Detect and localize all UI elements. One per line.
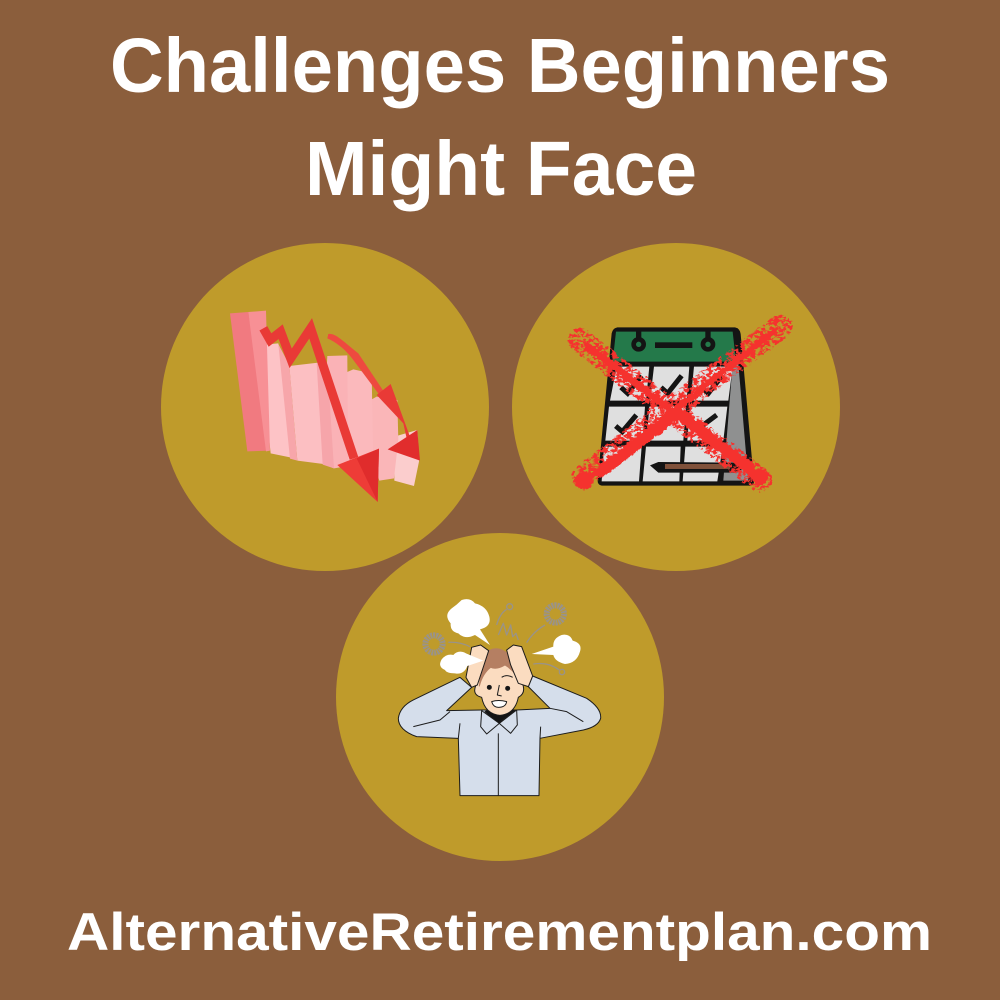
panel: falling market chart: [161, 243, 489, 571]
website footer: AlternativeRetirementplan.com: [67, 903, 932, 962]
panel: cancelled schedule: [512, 243, 840, 571]
hair: [479, 649, 519, 686]
title: Might Face: [305, 126, 697, 212]
icon: crossed-out calendar: [575, 327, 780, 489]
title: [110, 23, 890, 212]
calendar body: [598, 327, 754, 486]
hands: [466, 645, 489, 687]
stress doodles: [425, 604, 565, 675]
speech clouds: [447, 599, 490, 645]
red scribbled cross: [575, 327, 780, 489]
icon: falling bar chart with red arrows: [230, 311, 420, 502]
icon: stressed man holding his head: [398, 599, 601, 796]
face details: [487, 685, 491, 689]
head: [475, 665, 524, 715]
neck: [485, 703, 515, 723]
title: Challenges Beginners: [110, 23, 890, 109]
shirt: [398, 676, 601, 796]
collar: [481, 711, 499, 734]
panel: stressed beginner: [336, 533, 664, 861]
